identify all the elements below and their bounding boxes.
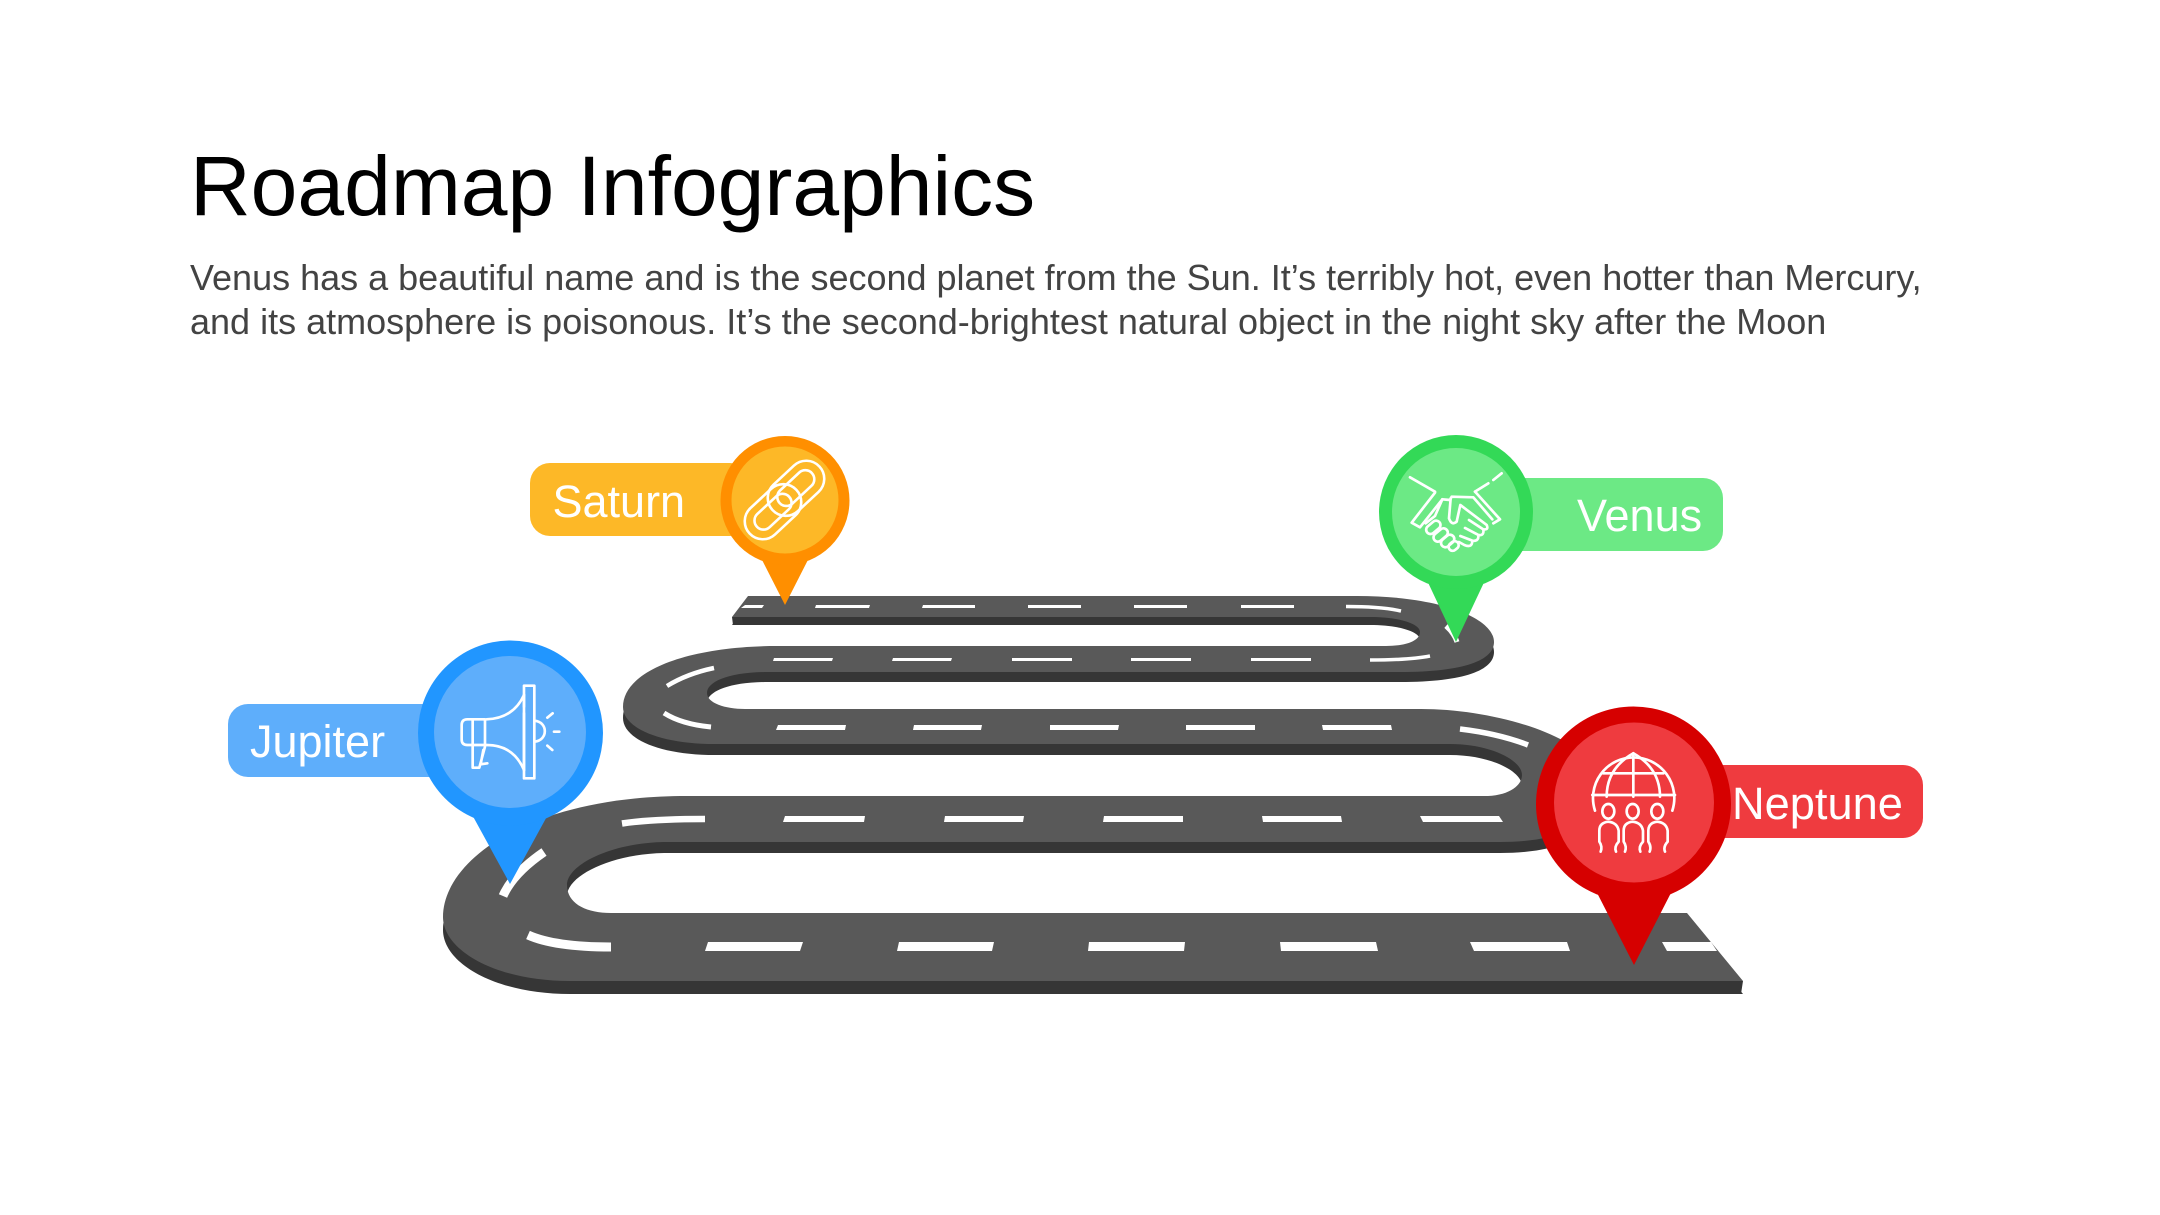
marker: Venus	[1379, 435, 1723, 642]
pin: Saturn	[720, 436, 850, 605]
road surface	[443, 596, 1743, 981]
road centre dashes	[705, 605, 1717, 951]
label: Neptune: Neptune	[1732, 778, 1903, 829]
icon: handshake	[1410, 473, 1502, 552]
marker: Jupiter	[228, 640, 603, 884]
label: Saturn	[530, 463, 750, 536]
description text: Venus has a beautiful name and is the second planet from the Sun. It’s terribly hot, even hotter than Mercury,	[190, 257, 1922, 298]
road side extrusion	[443, 604, 1743, 994]
label: Jupiter: Jupiter	[250, 716, 385, 767]
description text: and its atmosphere is poisonous. It’s the second-brightest natural object in the night sky after the Moon	[190, 301, 1826, 342]
title: Roadmap Infographics	[190, 139, 1035, 233]
label: Jupiter	[228, 704, 468, 777]
icon: megaphone	[462, 686, 559, 778]
label: Venus	[1500, 478, 1723, 551]
marker: Saturn	[530, 436, 850, 605]
pin: Venus	[1379, 435, 1533, 642]
pin: Neptune	[1536, 706, 1731, 965]
label: Saturn: Saturn	[552, 476, 685, 527]
description text	[190, 257, 1922, 342]
label: Venus: Venus	[1577, 490, 1702, 541]
label: Neptune	[1700, 765, 1923, 838]
marker: Neptune	[1536, 706, 1923, 965]
pin: Jupiter	[418, 640, 603, 884]
icon: globe with people	[1592, 753, 1675, 852]
icon: chain link	[737, 453, 832, 547]
winding road	[443, 596, 1743, 994]
